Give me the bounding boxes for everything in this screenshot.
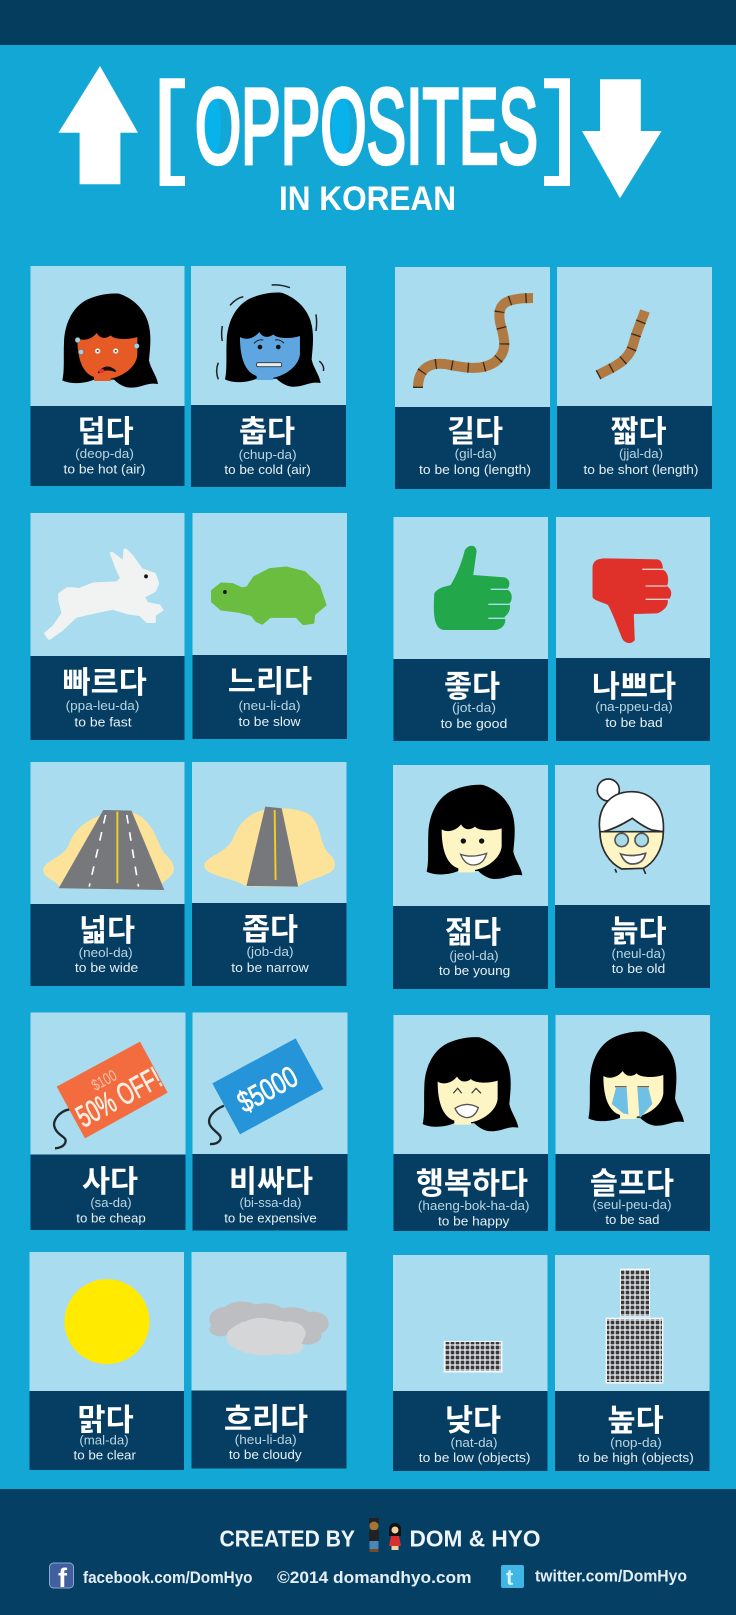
romanization: (chup-da) [239, 447, 297, 462]
card: fast [30, 513, 184, 740]
icon: blue price tag: $5000 [232, 1060, 303, 1120]
card: cheap [30, 1012, 186, 1230]
icon: down arrow [582, 79, 662, 198]
icon: cloud [209, 1301, 329, 1355]
word: 슬프다 [590, 1167, 674, 1201]
romanization: (job-da) [246, 944, 294, 959]
icon: dom [369, 1518, 379, 1552]
meaning: to be cheap [76, 1211, 146, 1226]
word: 좋다 [444, 670, 500, 704]
icon: thumb up [434, 546, 512, 630]
card: narrow [192, 762, 346, 986]
meaning: to be bad [605, 715, 663, 730]
card: happy [394, 1015, 548, 1231]
icon: hyo [389, 1523, 401, 1550]
word: 비싸다 [229, 1165, 313, 1199]
romanization: (gil-da) [455, 446, 497, 461]
icon: facebook: f [58, 1563, 68, 1593]
romanization: (haeng-bok-ha-da) [418, 1198, 530, 1213]
word: 길다 [447, 415, 503, 449]
word: 흐리다 [224, 1403, 308, 1437]
icon: tall building [606, 1269, 663, 1384]
subheading: IN KOREAN [279, 180, 456, 218]
romanization: (heu-li-da) [235, 1432, 297, 1447]
title [58, 66, 662, 218]
word: 덥다 [78, 415, 134, 449]
icon: rabbit [46, 550, 162, 638]
romanization: (neu-li-da) [238, 698, 300, 713]
meaning: to be cold (air) [224, 462, 311, 477]
card: cloudy [192, 1252, 346, 1468]
card: sad [556, 1015, 710, 1231]
meaning: to be narrow [231, 960, 309, 975]
meaning: to be clear [74, 1448, 137, 1463]
word: 춥다 [239, 415, 295, 449]
icon: right bracket [544, 78, 570, 186]
card: cold [191, 266, 346, 487]
icon: happy face [423, 1037, 518, 1131]
card: hot [30, 266, 184, 486]
icon: long rope [418, 298, 533, 388]
romanization: (jeol-da) [449, 948, 499, 963]
romanization: (neul-da) [612, 946, 666, 961]
word: 젊다 [445, 916, 501, 950]
card: bad [556, 517, 710, 741]
card: short [557, 267, 712, 489]
word: 낮다 [445, 1404, 501, 1438]
word: 높다 [608, 1404, 664, 1438]
icon: cold face [217, 285, 324, 387]
word: 행복하다 [416, 1167, 528, 1201]
icon: orange price tag: $100 [89, 1067, 120, 1095]
romanization: (nat-da) [450, 1435, 498, 1450]
card: clear [30, 1252, 184, 1470]
meaning: to be wide [75, 960, 138, 975]
icon: twitter [501, 1565, 524, 1590]
icon: sad face [588, 1031, 684, 1126]
romanization: (bi-ssa-da) [240, 1195, 302, 1210]
meaning: to be old [612, 961, 665, 976]
icon: old face [597, 779, 663, 874]
icon: hot face [62, 293, 158, 388]
romanization: (sa-da) [90, 1195, 132, 1210]
credit text: CREATED BY [220, 1526, 355, 1552]
card: high [555, 1255, 710, 1471]
top band [0, 0, 736, 45]
word: 나쁘다 [592, 670, 676, 704]
card: good [394, 517, 548, 741]
icon: left bracket [160, 78, 185, 186]
meaning: to be low (objects) [419, 1450, 530, 1465]
copyright: ©2014 domandhyo.com [277, 1568, 472, 1587]
word: 빠르다 [63, 666, 147, 700]
meaning: to be cloudy [229, 1447, 302, 1462]
romanization: (seul-peu-da) [592, 1197, 672, 1212]
icon: low building [444, 1341, 502, 1372]
word: 늙다 [610, 915, 667, 949]
romanization: (jot-da) [452, 700, 496, 715]
card: slow [192, 513, 347, 739]
romanization: (ppa-leu-da) [66, 698, 139, 713]
romanization: (deop-da) [75, 446, 134, 461]
icon: orange price tag [54, 1042, 168, 1148]
icon: up arrow [58, 66, 138, 184]
icon: orange price tag: 50% OFF! [71, 1061, 167, 1134]
icon: young face [427, 785, 522, 879]
icon: blue price tag [209, 1038, 323, 1144]
icon: facebook [50, 1563, 74, 1593]
card: old [555, 765, 710, 988]
meaning: to be young [439, 963, 510, 978]
card: low [393, 1255, 548, 1471]
word: 느리다 [228, 665, 312, 699]
meaning: to be long (length) [419, 462, 531, 477]
meaning: to be short (length) [584, 462, 698, 477]
word: 넓다 [79, 914, 135, 948]
word: 짧다 [610, 415, 667, 449]
meaning: to be high (objects) [578, 1450, 694, 1465]
card: wide [30, 762, 184, 986]
meaning: to be sad [605, 1212, 659, 1227]
card: young [393, 765, 548, 989]
romanization: (neol-da) [79, 945, 133, 960]
meaning: to be good [441, 716, 507, 731]
icon: sun [64, 1279, 150, 1364]
meaning: to be fast [74, 714, 132, 730]
card: expensive [192, 1012, 348, 1230]
card: long [395, 267, 550, 489]
icon: short rope [598, 311, 645, 375]
word: 사다 [82, 1165, 138, 1199]
credit names: DOM & HYO [410, 1526, 540, 1552]
romanization: (jjal-da) [619, 446, 663, 461]
icon: narrow road [204, 807, 335, 887]
meaning: to be happy [438, 1214, 510, 1228]
meaning: to be expensive [224, 1211, 317, 1226]
romanization: (mal-da) [79, 1432, 129, 1447]
facebook link: facebook.com/DomHyo [83, 1568, 252, 1587]
romanization: (na-ppeu-da) [595, 699, 673, 714]
twitter link: twitter.com/DomHyo [535, 1567, 687, 1586]
footer [0, 1489, 736, 1615]
romanization: (nop-da) [610, 1435, 662, 1450]
icon: turtle [213, 568, 325, 624]
word: 좁다 [242, 913, 298, 947]
icon: thumb down [593, 558, 671, 643]
meaning: to be slow [238, 714, 301, 729]
icon: wide road [43, 810, 174, 890]
icon: twitter: t [506, 1565, 514, 1590]
meaning: to be hot (air) [64, 462, 146, 476]
word: 맑다 [78, 1404, 134, 1438]
